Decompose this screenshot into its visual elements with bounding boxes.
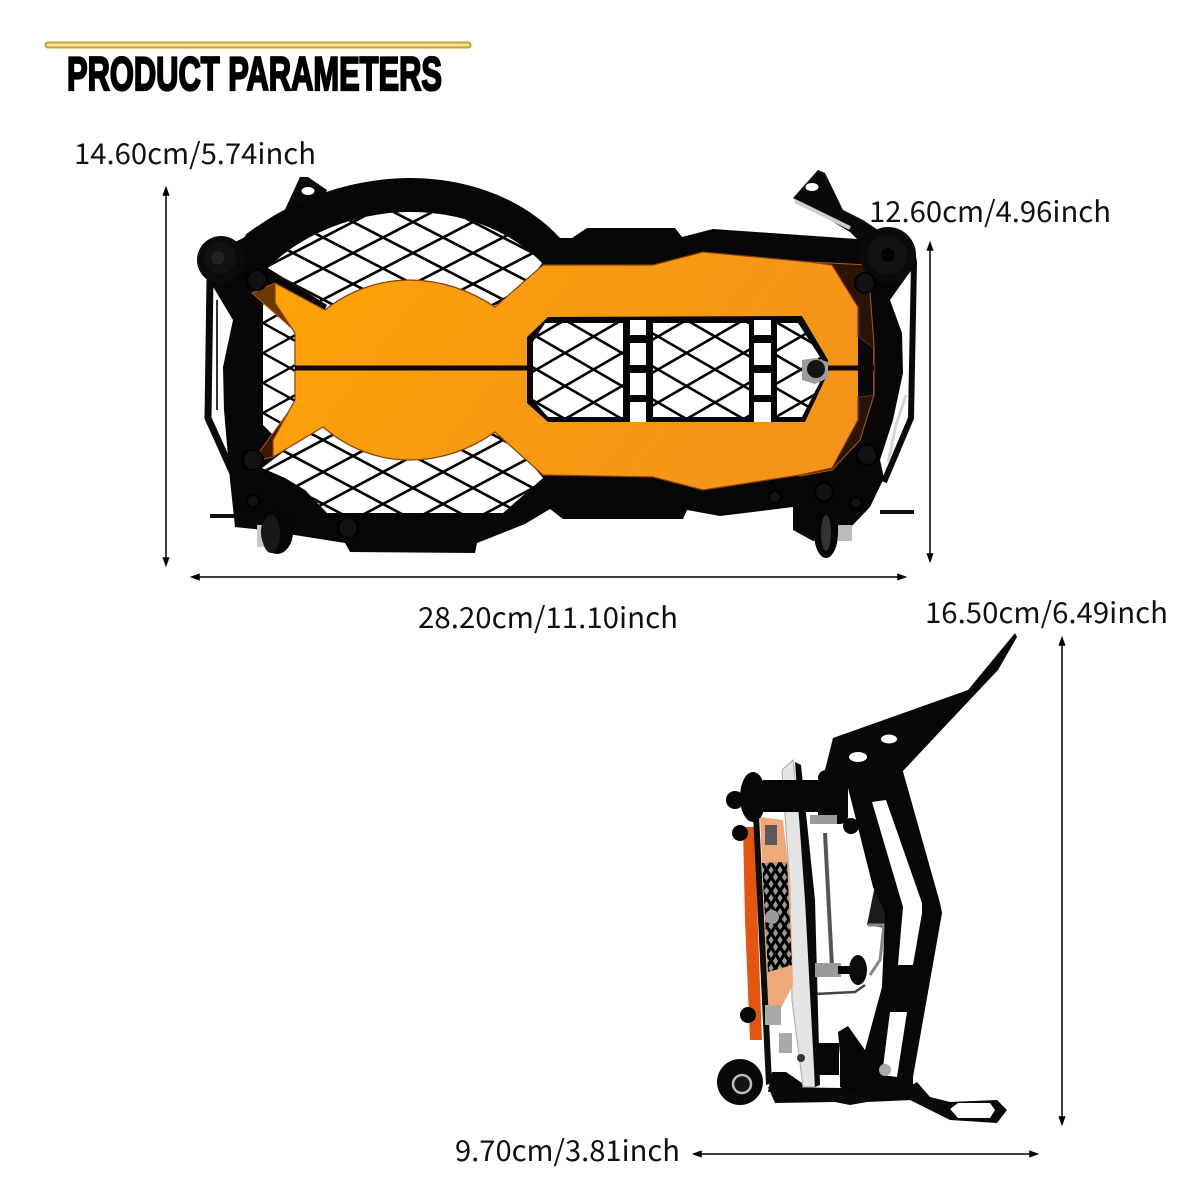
window bolt — [802, 358, 828, 384]
thin brace — [815, 985, 865, 994]
side strut: right — [884, 262, 914, 482]
arrow: width — [192, 574, 905, 580]
mesh: top — [268, 212, 542, 320]
lower tab — [768, 1072, 867, 1105]
black frame — [197, 178, 917, 553]
gold header bar — [46, 42, 470, 48]
inner mesh — [762, 862, 792, 972]
bolts — [243, 270, 877, 538]
translucent corners — [252, 262, 874, 476]
wrench foot — [910, 1082, 1007, 1123]
gaps between window panels — [630, 320, 771, 422]
mounting tab: top right — [793, 170, 884, 242]
bracket slot upper — [872, 800, 922, 965]
threaded rod — [825, 833, 832, 967]
orange tinted inner — [760, 817, 793, 1010]
arrow: depth — [694, 1152, 1037, 1156]
mounting hooks — [210, 512, 914, 516]
top nut — [810, 815, 837, 824]
centre mesh window 3 — [777, 323, 822, 417]
front strip — [751, 773, 772, 1085]
black plate strip — [795, 762, 820, 1087]
mounting holes — [849, 734, 897, 762]
arrow: overall height — [164, 188, 168, 565]
mesh: bottom — [262, 420, 543, 513]
dimension label: frame height: 12.60cm/4.96inch — [869, 189, 1111, 231]
centre window frame — [527, 316, 828, 422]
spool: bottom left — [257, 510, 293, 554]
spool: bottom right — [814, 508, 852, 558]
bracket slot lower — [882, 1012, 907, 1077]
centre mesh window 1 — [533, 323, 623, 417]
orange edge — [743, 827, 762, 1040]
dimension label: width: 28.20cm/11.10inch — [418, 595, 678, 637]
mesh: left — [263, 300, 300, 440]
title: PRODUCT PARAMETERS — [67, 47, 442, 100]
side strut: left — [208, 278, 235, 478]
upper flange — [825, 633, 1017, 780]
arrow: frame height — [928, 243, 932, 561]
lower standoff — [797, 1026, 865, 1075]
centre slit — [295, 366, 874, 370]
dimension label: overall height: 14.60cm/5.74inch — [74, 131, 316, 173]
dimension label: depth: 9.70cm/3.81inch — [455, 1128, 680, 1170]
nuts — [765, 825, 891, 1076]
side wheel — [717, 1059, 763, 1105]
dimension label: bracket height: 16.50cm/6.49inch — [925, 590, 1168, 632]
pivot knob: top left — [197, 236, 245, 284]
product photo: side view — [717, 633, 1017, 1123]
right edge of plate over frame — [858, 337, 873, 397]
product photo: headlight guard front view — [197, 170, 917, 558]
mounting tab: top left — [245, 177, 327, 240]
arrow: bracket height — [1060, 638, 1064, 1124]
upper standoff — [726, 770, 859, 1023]
pivot knob: top right — [860, 227, 916, 283]
bracket body — [840, 768, 942, 1102]
centre standoff — [815, 955, 867, 985]
centre mesh window 2 — [653, 323, 749, 417]
orange lens plate — [273, 252, 873, 490]
clear plate — [782, 760, 815, 1087]
rear support bracket — [867, 885, 887, 975]
mesh bolt — [765, 910, 779, 924]
